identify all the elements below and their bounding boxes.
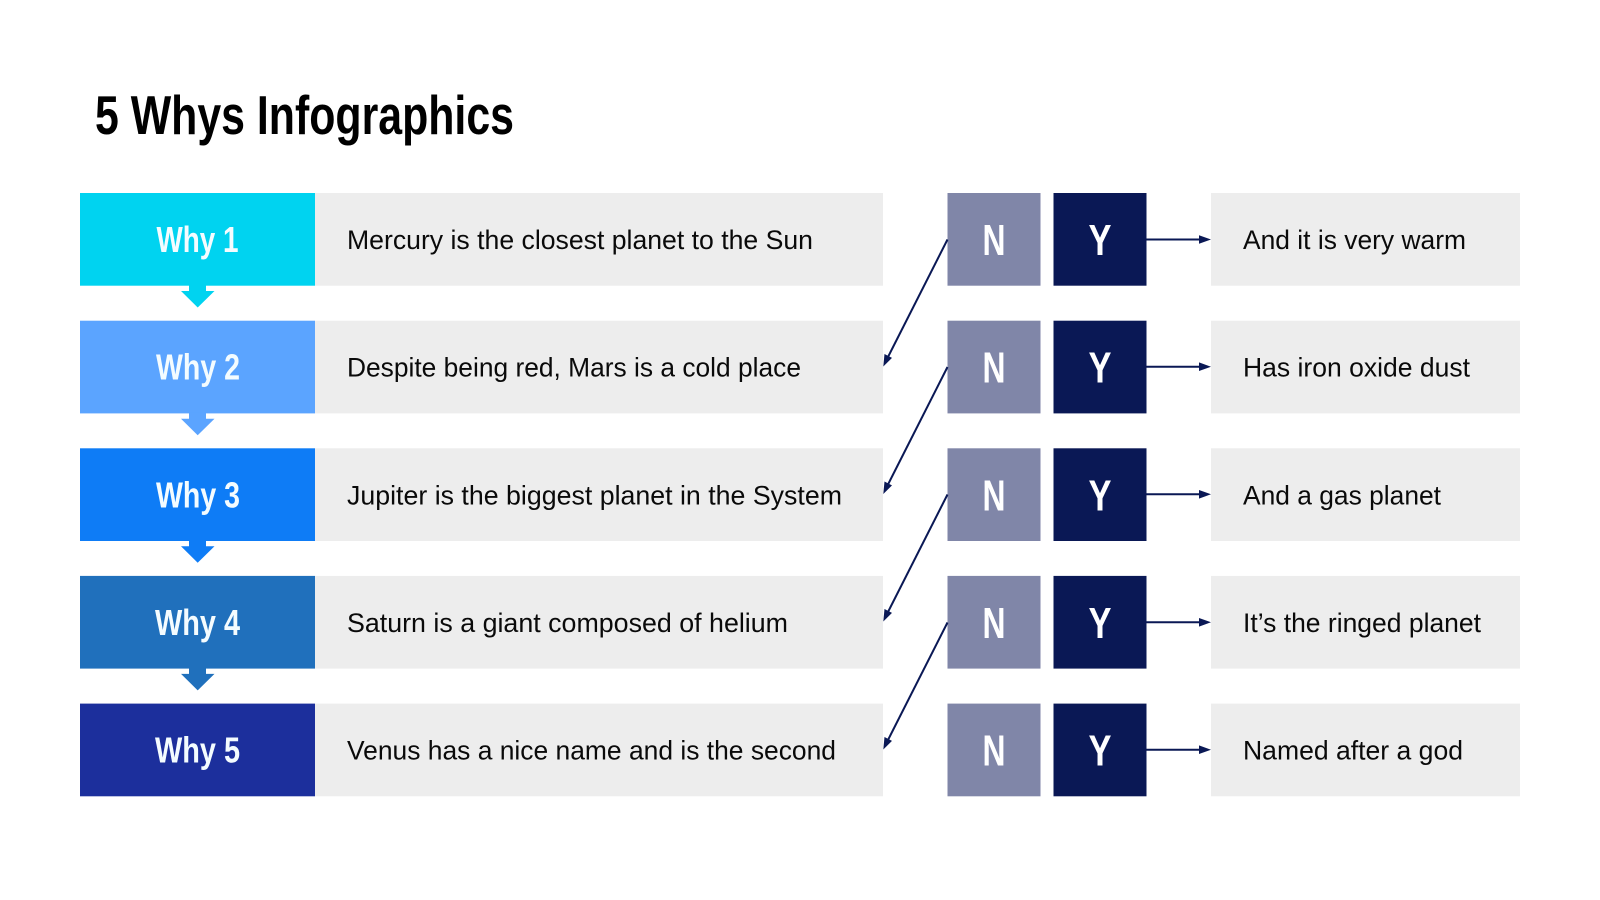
arrow: yes 1 <box>1146 235 1211 244</box>
answers row 1: And it is very warm <box>1243 225 1466 255</box>
answers row 2: Has iron oxide dust <box>1243 353 1470 383</box>
row 3: why 3: Why 3 <box>156 474 240 515</box>
row 2: why 2: Why 2 <box>156 347 240 388</box>
arrow: no 3 to why 4 <box>883 494 948 622</box>
answers row 3: And a gas planet <box>1243 480 1441 510</box>
answers row 3 <box>948 448 1520 541</box>
arrow: no 1 to why 2 <box>883 240 948 366</box>
answers row 2: N <box>982 344 1006 393</box>
row 3: why 3: Jupiter is the biggest planet in the System <box>347 480 842 510</box>
arrow: yes 2 <box>1146 362 1211 371</box>
row 1: why 1: Mercury is the closest planet to the Sun <box>347 225 813 255</box>
answers row 4 <box>948 576 1520 669</box>
row 5: why 5: Why 5 <box>155 730 240 771</box>
answers row 4: It’s the ringed planet <box>1243 608 1481 638</box>
arrow: yes 5 <box>1146 745 1211 754</box>
answers row 5: N <box>982 727 1006 776</box>
answers row 1: N <box>982 216 1006 265</box>
row 2: why 2: Despite being red, Mars is a cold place <box>347 353 801 383</box>
row 1: why 1 <box>80 193 883 308</box>
answers row 2: Y <box>1088 344 1112 393</box>
row 5: why 5 <box>80 704 883 796</box>
answers row 1 <box>948 193 1520 286</box>
arrow: yes 3 <box>1146 490 1211 499</box>
answers row 4: Y <box>1088 599 1112 648</box>
arrow: why 4 down <box>181 668 214 690</box>
row 3: why 3 <box>80 448 883 563</box>
answers row 5: Named after a god <box>1243 736 1463 766</box>
arrow: yes 4 <box>1146 618 1211 627</box>
row 4: why 4 <box>80 576 883 690</box>
answers row 5: Y <box>1088 727 1112 776</box>
answers row 3: N <box>982 471 1006 520</box>
arrow: why 1 down <box>181 285 214 308</box>
arrow: no 2 to why 3 <box>883 367 948 494</box>
arrow: why 3 down <box>181 540 214 563</box>
row 2: why 2 <box>80 321 883 435</box>
answers row 4: N <box>982 599 1006 648</box>
row 5: why 5: Venus has a nice name and is the second <box>347 736 836 766</box>
arrow: no 4 to why 5 <box>883 622 948 750</box>
answers row 5 <box>948 704 1520 796</box>
answers row 1: Y <box>1088 216 1112 265</box>
row 1: why 1: Why 1 <box>156 219 238 260</box>
row 4: why 4: Why 4 <box>155 602 240 643</box>
title: 5 Whys Infographics <box>95 84 514 146</box>
answers row 3: Y <box>1088 471 1112 520</box>
arrow: why 2 down <box>181 413 214 435</box>
answers row 2 <box>948 321 1520 413</box>
row 4: why 4: Saturn is a giant composed of helium <box>347 608 788 638</box>
